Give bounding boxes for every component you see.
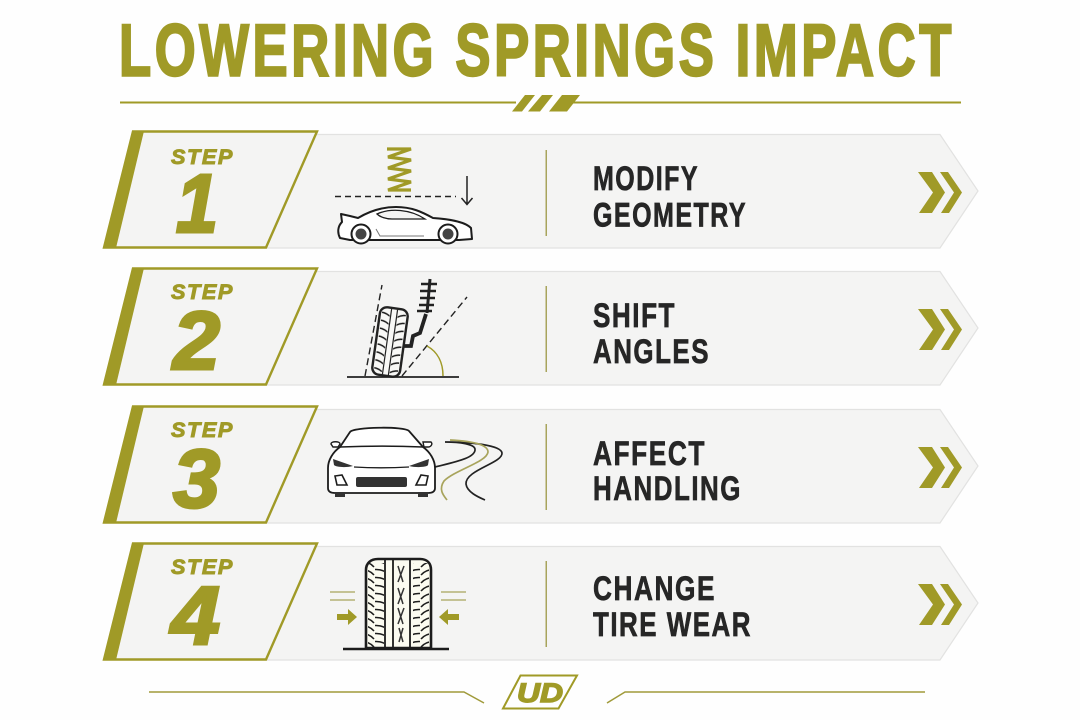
label: MODIFY [593, 160, 699, 198]
step badge: 4 [169, 569, 220, 662]
panel: step 3 [103, 406, 978, 525]
label: SHIFT [593, 297, 676, 335]
panel: step 2 [103, 268, 978, 387]
panel: step 1 [103, 131, 978, 250]
step badge: STEP [171, 556, 234, 579]
divider [546, 561, 547, 647]
icon: chevrons [918, 309, 962, 350]
header divider with slashes [120, 95, 961, 112]
label [593, 435, 742, 508]
row background arrow [200, 272, 978, 385]
step badge [103, 406, 317, 525]
step badge: 3 [173, 432, 220, 525]
divider [546, 286, 547, 372]
panel: step 4 [103, 543, 978, 662]
label: ANGLES [593, 333, 710, 371]
step badge: STEP [171, 281, 234, 304]
row background arrow [200, 546, 978, 660]
label [593, 570, 752, 644]
icon: chevrons [918, 172, 962, 213]
divider [546, 424, 547, 510]
step badge [103, 543, 317, 662]
footer lines [149, 692, 925, 703]
step badge [103, 131, 317, 250]
icon: front of car with winding road [328, 428, 502, 500]
label: AFFECT [593, 435, 706, 473]
step badge: 1 [176, 157, 218, 250]
label: TIRE WEAR [593, 606, 752, 644]
icon: tire wear contact patch [330, 559, 466, 649]
row background arrow [200, 134, 978, 248]
label [593, 160, 747, 234]
icon: spring above lowered car [335, 149, 472, 244]
step badge: STEP [171, 146, 234, 169]
step badge [103, 268, 317, 387]
label: GEOMETRY [593, 196, 747, 234]
divider [546, 150, 547, 236]
step badge: 2 [171, 294, 220, 387]
step badge: STEP [171, 419, 234, 442]
icon: chevrons [918, 447, 962, 488]
label: HANDLING [593, 470, 742, 508]
label [593, 297, 710, 371]
row background arrow [200, 410, 978, 523]
icon: chevrons [918, 584, 962, 625]
icon: wheel camber angles [347, 279, 467, 378]
logo [503, 676, 577, 708]
logo: UD [517, 678, 563, 708]
label: CHANGE [593, 570, 716, 608]
